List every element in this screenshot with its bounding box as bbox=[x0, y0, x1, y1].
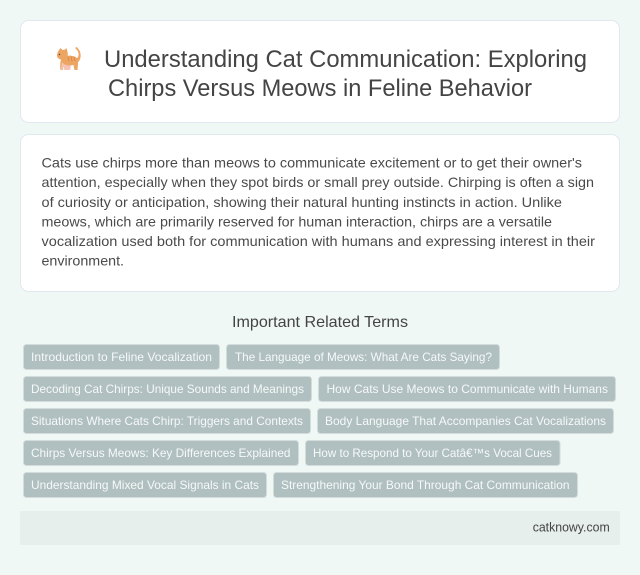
tag: Situations Where Cats Chirp: Triggers and Contexts bbox=[31, 414, 303, 428]
tag: Introduction to Feline Vocalization bbox=[31, 350, 212, 364]
tag bbox=[226, 344, 500, 370]
title: Chirps Versus Meows in Feline Behavior bbox=[108, 75, 532, 102]
title bbox=[104, 46, 587, 102]
tag: Strengthening Your Bond Through Cat Communication bbox=[281, 478, 570, 492]
icon: cat bbox=[57, 47, 81, 70]
tag bbox=[24, 376, 312, 402]
panel: description bbox=[20, 134, 620, 292]
tag: How Cats Use Meows to Communicate with Humans bbox=[326, 382, 608, 396]
tag: Chirps Versus Meows: Key Differences Explained bbox=[31, 446, 290, 460]
panel: header bbox=[20, 20, 620, 122]
tag: Body Language That Accompanies Cat Vocalizations bbox=[325, 414, 606, 428]
text block: description: attention, especially when they spot birds or small prey outside. Chirping is often a sign bbox=[42, 174, 594, 190]
text block: description bbox=[42, 154, 595, 268]
text block: description: vocalization used both for communication with humans and expressing interest in their bbox=[42, 233, 595, 249]
text block: description: environment. bbox=[42, 252, 124, 268]
tag bbox=[24, 408, 310, 434]
title: Understanding Cat Communication: Exploring bbox=[104, 46, 587, 73]
tag list: related terms bbox=[24, 344, 616, 498]
tag bbox=[318, 408, 614, 434]
tag bbox=[24, 472, 266, 498]
tag: Decoding Cat Chirps: Unique Sounds and Meanings bbox=[31, 382, 304, 396]
text block: description: of curiosity or anticipation, showing their natural hunting instincts in action. Unlike bbox=[42, 194, 562, 210]
footer bbox=[20, 511, 620, 545]
heading: related terms: Important Related Terms bbox=[232, 314, 408, 331]
footer: source: catknowy.com bbox=[533, 521, 610, 535]
tag bbox=[24, 440, 298, 466]
text block: description: Cats use chirps more than meows to communicate excitement or to get their owner's bbox=[42, 154, 582, 170]
tag: Understanding Mixed Vocal Signals in Cats bbox=[31, 478, 259, 492]
tag bbox=[306, 440, 560, 466]
tag: How to Respond to Your Catâ€™s Vocal Cues bbox=[313, 446, 552, 460]
tag bbox=[318, 376, 616, 402]
tag: The Language of Meows: What Are Cats Saying? bbox=[235, 350, 492, 364]
text block: description: meows, which are primarily reserved for human interaction, chirps are a versatile bbox=[42, 214, 552, 230]
tag bbox=[274, 472, 578, 498]
tag bbox=[24, 344, 220, 370]
